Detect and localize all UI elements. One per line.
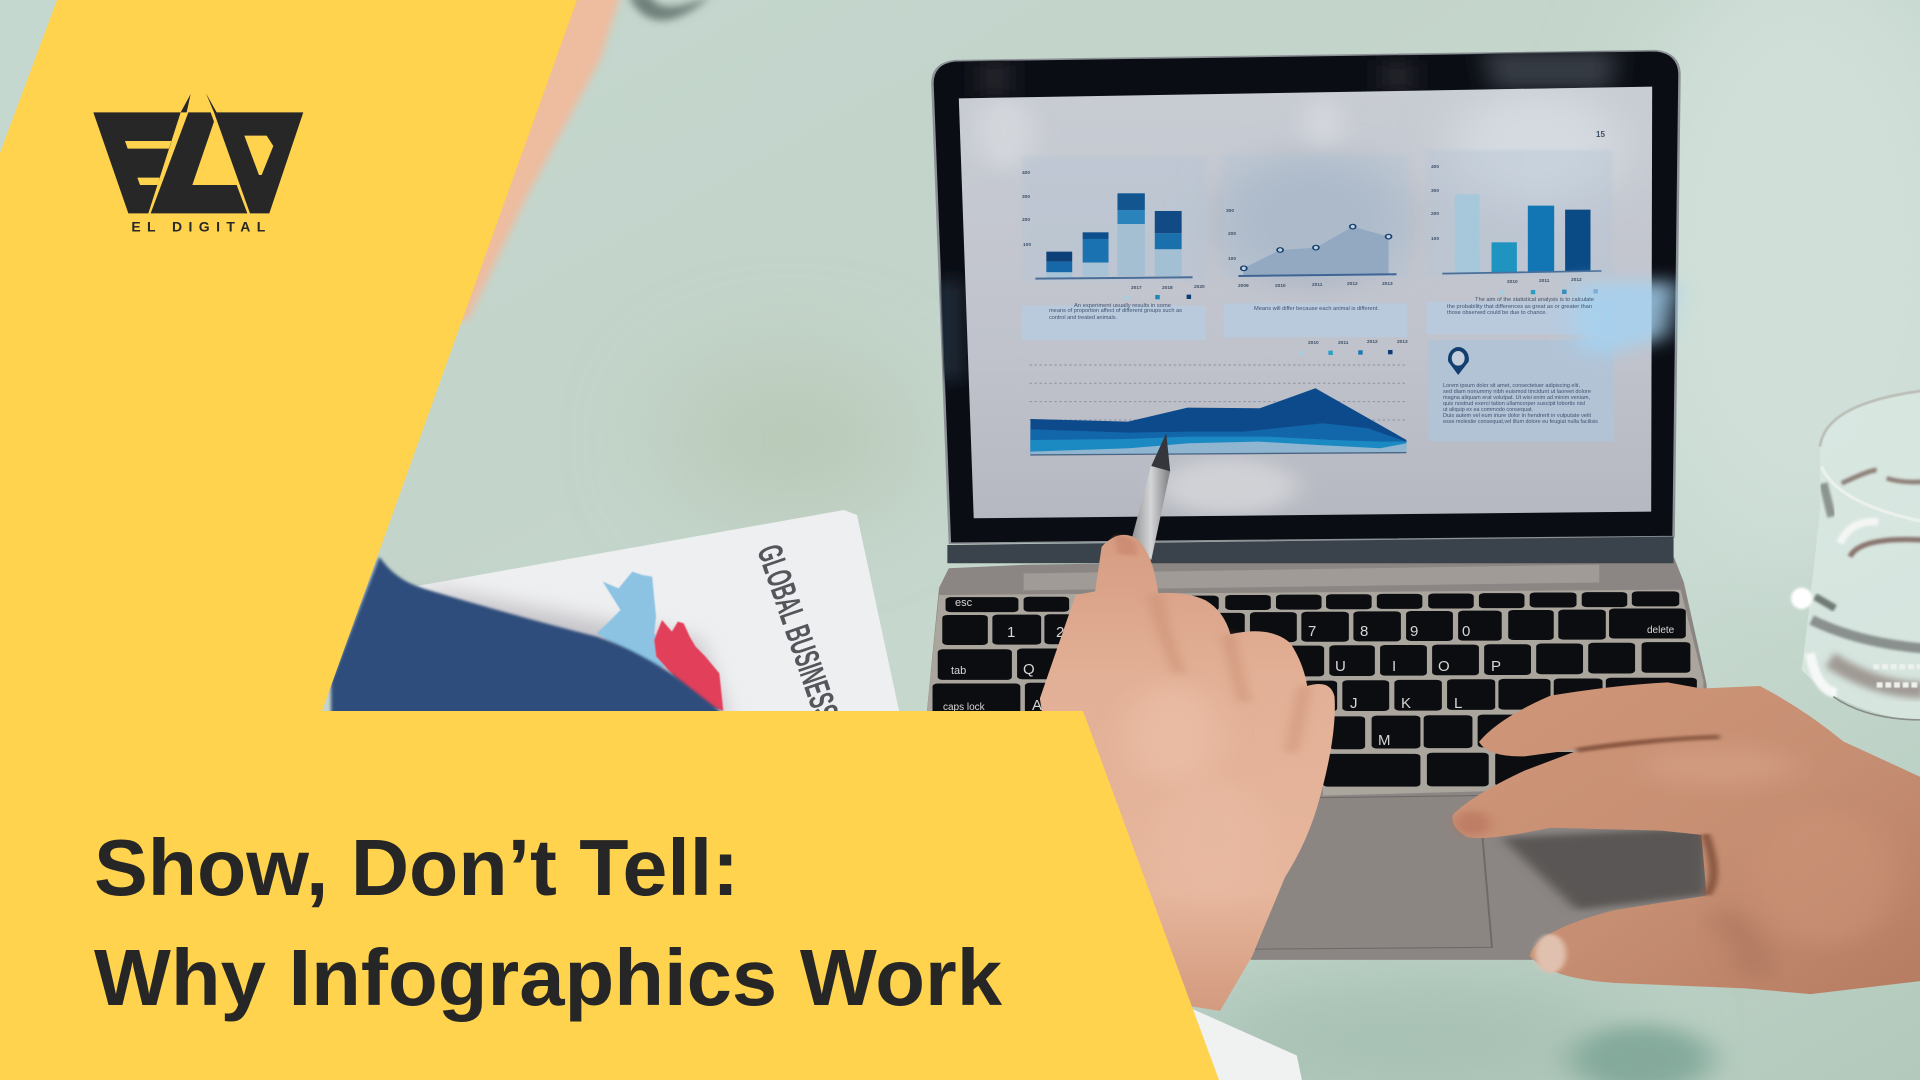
screen captions: means of proportion affect of different groups such as: [1049, 308, 1183, 314]
key legends: K: [1401, 695, 1411, 712]
screen small labels: 100: [1431, 236, 1439, 242]
screen captions: magna aliquam erat volutpat. Ut wisi enim ad minim veniam,: [1443, 395, 1590, 401]
screen small labels: 2011: [1539, 278, 1550, 284]
screen small labels: 2020: [1194, 284, 1205, 290]
newspaper map: [597, 572, 723, 711]
screen small labels: 2012: [1367, 339, 1378, 345]
trackpad: [1255, 796, 1492, 949]
screen small labels: 2011: [1312, 282, 1323, 288]
shirt cuff: [1193, 1009, 1302, 1080]
screen small labels: 2011: [1338, 340, 1349, 346]
screen captions: the probability that differences as great as or greater than: [1447, 304, 1592, 310]
pen: [1131, 433, 1170, 560]
laptop: [926, 50, 1708, 960]
screen small labels: 2010: [1275, 283, 1286, 289]
key legends: tab: [951, 665, 966, 677]
screen small labels: 200: [1228, 231, 1236, 237]
key legends: 9: [1410, 623, 1418, 640]
bar chart: stacked: [1035, 193, 1193, 279]
newspaper headline: GLOBAL BUSINESS: [749, 540, 846, 725]
screen small labels: 400: [1431, 164, 1439, 170]
key legends: L: [1454, 695, 1462, 712]
screen: [959, 87, 1652, 518]
screen captions: ut aliquip ex ea commodo consequat.: [1443, 407, 1533, 413]
light blue window reflection: [1572, 282, 1679, 357]
key legends: 2: [1056, 624, 1064, 641]
glass of water: [1791, 391, 1920, 722]
screen captions: control and treated animals.: [1049, 315, 1117, 321]
bright reflection dot: [1791, 588, 1812, 609]
key legends: 7: [1308, 623, 1316, 640]
screen small labels: 100: [1228, 256, 1236, 262]
screen small labels: 200: [1022, 217, 1030, 223]
bottom key rows: [1323, 715, 1593, 787]
key legends: 8: [1360, 623, 1368, 640]
letter key row two: [933, 678, 1697, 716]
key legends: M: [1378, 732, 1390, 749]
area chart: [1029, 365, 1407, 455]
screen captions: quis nostrud exerci tation ullamcorper suscipit lobortis nisl: [1443, 401, 1585, 407]
key legends: 1: [1007, 624, 1015, 641]
screen captions: Duis autem vel eum iriure dolor in hendrerit in vulputate velit: [1443, 413, 1592, 419]
function key row: [946, 591, 1679, 612]
screen captions: sed diam nonummy nibh euismod tincidunt ut laoreet dolore: [1443, 389, 1591, 395]
screen small labels: 2018: [1162, 285, 1173, 291]
line chart with area: [1238, 224, 1397, 276]
screen captions: those observed could be due to chance.: [1447, 310, 1547, 316]
screen small labels: 300: [1431, 188, 1439, 194]
screen small labels: 2013: [1382, 281, 1393, 287]
screen small labels: 2013: [1397, 339, 1408, 345]
laptop base: [926, 557, 1708, 960]
hand: right hand on trackpad: [1452, 682, 1920, 994]
screen small labels: 15: [1596, 130, 1605, 139]
screen captions: Means will differ because each animal is different.: [1254, 306, 1379, 312]
screen captions: The aim of the statistical analysis is to calculate: [1475, 297, 1594, 303]
palm rest shadow: [1502, 827, 1708, 910]
hand: left hand with pen: [1040, 535, 1335, 1011]
key legends: delete: [1647, 625, 1675, 636]
key legends: I: [1392, 658, 1396, 675]
screen small labels: 100: [1023, 242, 1031, 248]
yellow panel: [0, 0, 1219, 1080]
key legends: 0: [1462, 623, 1470, 640]
logo wordmark: EL DIGITAL: [131, 219, 266, 235]
screen captions: An experiment usually results in some: [1074, 303, 1171, 309]
laptop lid and screen: [932, 50, 1680, 563]
screen small labels: 2010: [1308, 340, 1319, 346]
location panel: [1428, 340, 1614, 442]
key legends: U: [1335, 658, 1346, 675]
logo mark: [93, 93, 303, 213]
screen captions: [1049, 297, 1599, 425]
letter key row one: [938, 642, 1690, 680]
screen small labels: 2009: [1238, 283, 1249, 289]
key legends: caps lock: [943, 702, 986, 713]
key legends: J: [1350, 695, 1358, 712]
screen captions: esse molestie consequat,vel illum dolore eu feugiat nulla facilisis: [1443, 419, 1599, 425]
screen small labels: 2017: [1131, 285, 1142, 291]
navy sleeve: [331, 557, 727, 717]
bar chart: plain: [1442, 194, 1601, 274]
newspaper: [417, 510, 901, 725]
legend markers: [1124, 289, 1598, 355]
key legends: [943, 597, 1675, 749]
screen small labels: 400: [1022, 170, 1030, 176]
logo: EL Digital: [93, 93, 303, 235]
screen small labels: 200: [1431, 211, 1439, 217]
screen captions: Lorem ipsum dolor sit amet, consectetuer adipiscing elit,: [1443, 383, 1580, 389]
number key row: [942, 609, 1686, 645]
key legends: O: [1438, 658, 1450, 675]
key legends: Q: [1023, 661, 1035, 678]
screen small labels: 2012: [1347, 281, 1358, 287]
screen small labels: [1022, 130, 1605, 346]
chart caption boxes: [1022, 302, 1611, 340]
thumbnail: [1535, 934, 1566, 973]
screen small labels: 300: [1226, 208, 1234, 214]
key legends: esc: [955, 597, 973, 609]
key legends: P: [1491, 658, 1501, 675]
screen small labels: 300: [1022, 194, 1030, 200]
screen reflections: [975, 90, 1621, 515]
title line two: Why Infographics Work: [94, 933, 1003, 1022]
chart panel backgrounds: [1024, 150, 1610, 216]
title: [94, 823, 1003, 1022]
blurred arm at the top edge: [440, 0, 712, 320]
screen small labels: 2012: [1571, 277, 1582, 283]
title line one: Show, Don’t Tell:: [94, 823, 739, 912]
key legends: A: [1032, 697, 1042, 714]
screen small labels: 2010: [1507, 279, 1518, 285]
